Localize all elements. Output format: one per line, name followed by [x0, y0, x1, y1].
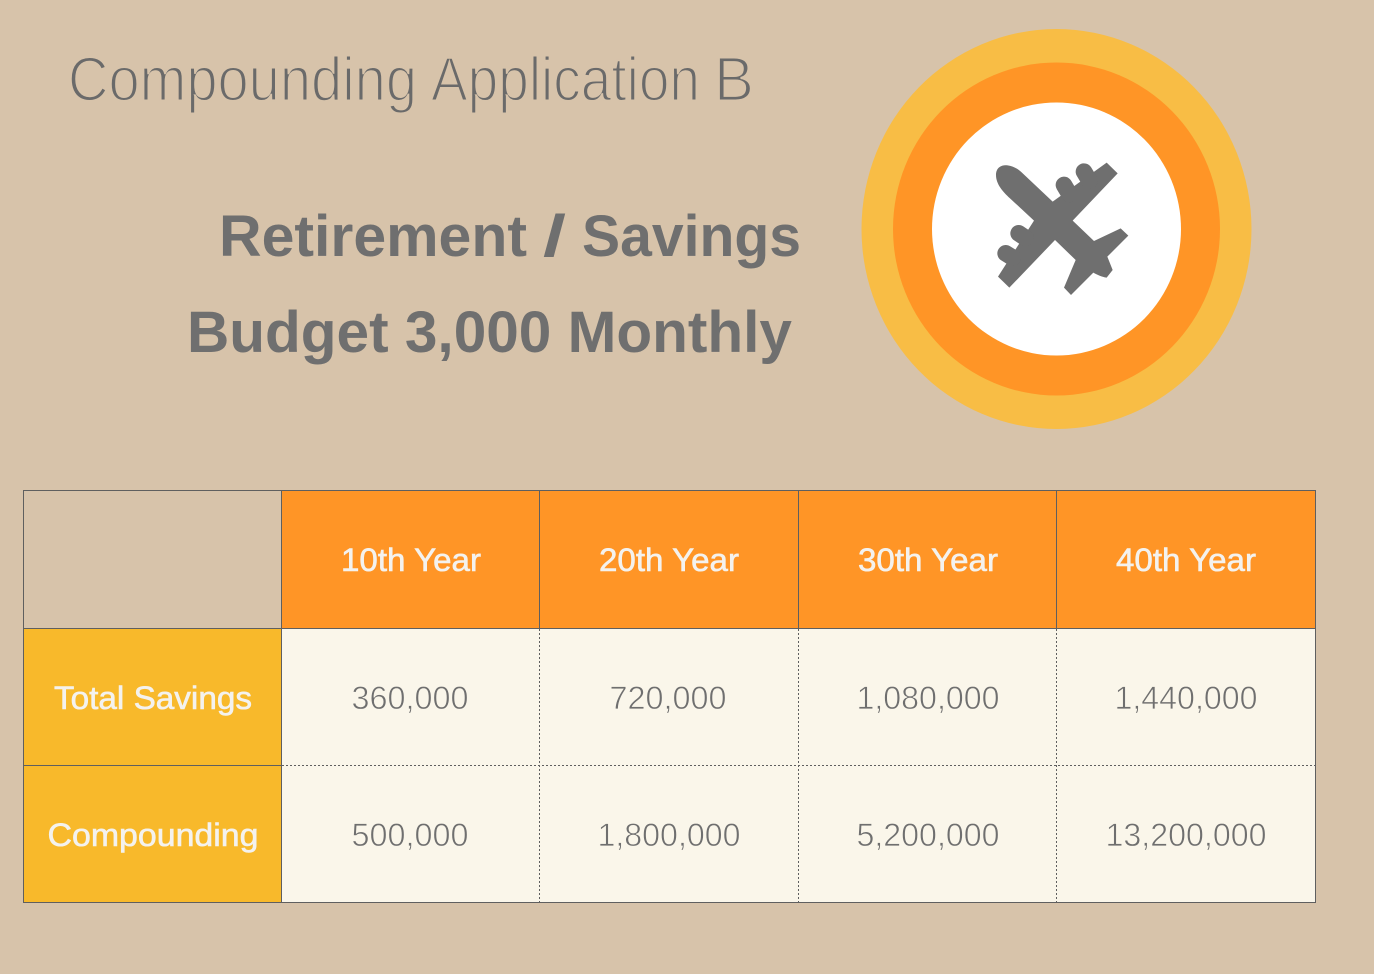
- icon: airplane: [996, 163, 1128, 295]
- table header row: [282, 491, 1315, 628]
- heading: retirement / savings: Retirement: [219, 204, 527, 269]
- values: total savings: [352, 680, 1258, 716]
- values: total savings: 1,440,000: [1114, 680, 1258, 716]
- values: compounding: 500,000: [352, 817, 468, 853]
- values: total savings: 720,000: [610, 680, 726, 716]
- values: compounding: [352, 817, 1266, 853]
- values: compounding: 1,800,000: [598, 817, 740, 853]
- values: total savings: 1,080,000: [856, 680, 1000, 716]
- title: [68, 46, 754, 114]
- heading: retirement / savings: [219, 204, 801, 269]
- icon: airplane badge: [862, 29, 1252, 429]
- values: compounding: 5,200,000: [856, 817, 1000, 853]
- heading: retirement / savings: Savings: [582, 204, 801, 269]
- title: B: [714, 46, 754, 114]
- table body: [282, 629, 1315, 902]
- heading: budget: Budget 3,000 Monthly: [187, 300, 792, 365]
- values: compounding: 13,200,000: [1106, 817, 1266, 853]
- table header row: 30th Year: [858, 542, 998, 578]
- row labels: Compounding: [48, 817, 258, 853]
- values: total savings: 360,000: [352, 680, 468, 716]
- table: [24, 490, 1316, 902]
- table header row: 10th Year: [341, 542, 481, 578]
- row labels: [24, 629, 282, 902]
- table header row: 20th Year: [599, 542, 739, 578]
- title: Compounding: [68, 46, 417, 114]
- table grid lines: [24, 490, 1316, 902]
- title: Application: [431, 46, 700, 114]
- heading: retirement / savings: /: [543, 204, 566, 269]
- table header row: 40th Year: [1116, 542, 1256, 578]
- row labels: Total Savings: [54, 680, 252, 716]
